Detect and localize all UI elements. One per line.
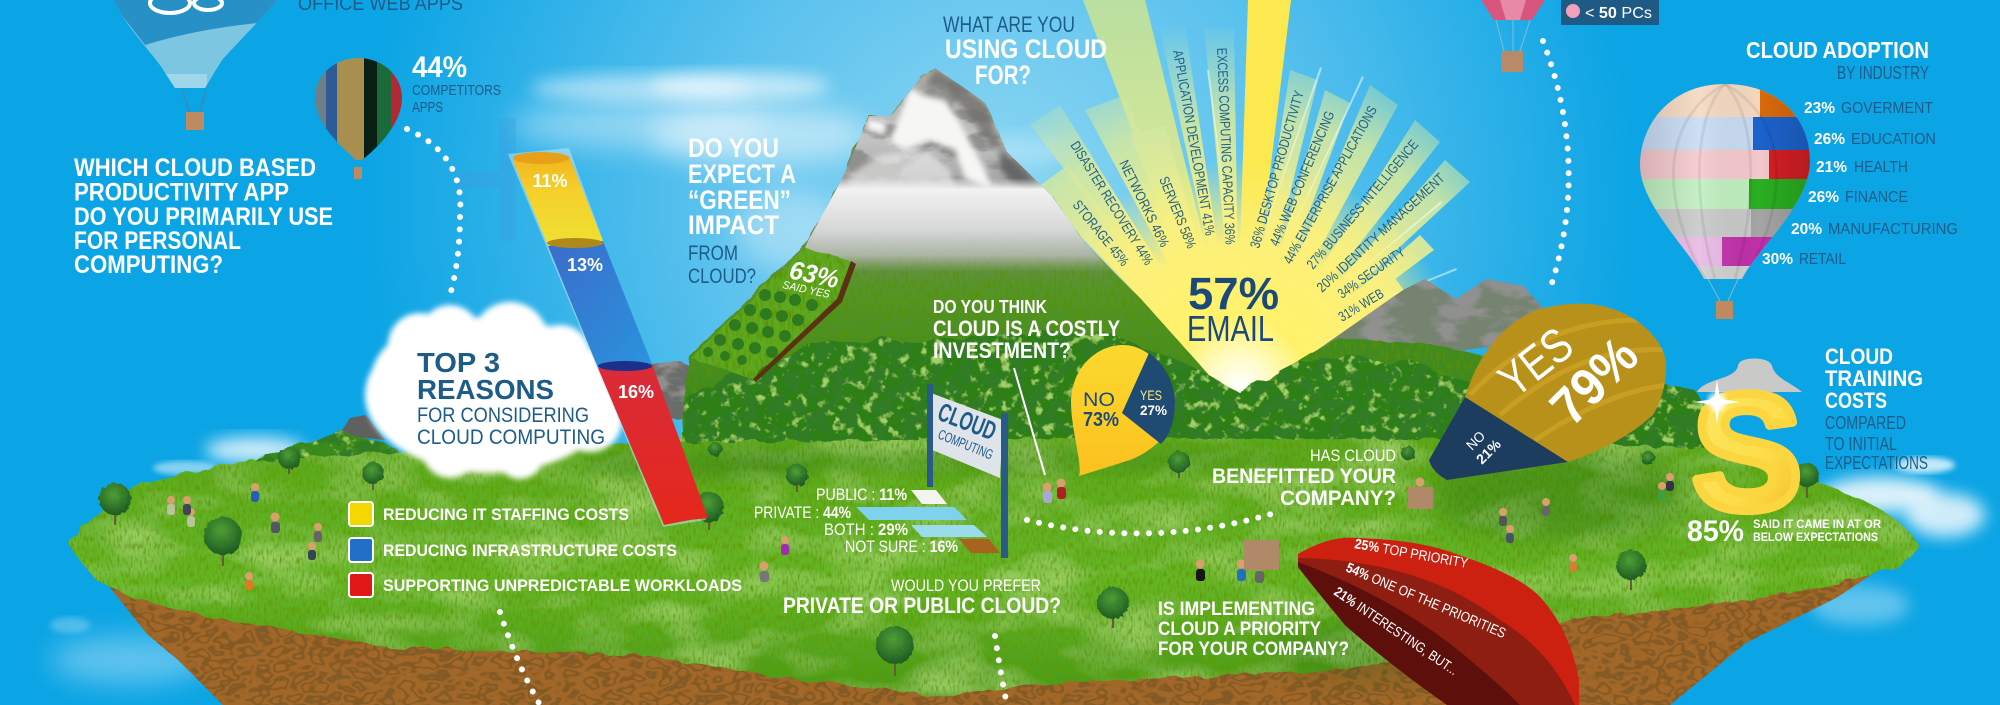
industry labels xyxy=(1762,100,1958,268)
red balloon: priority chart xyxy=(1298,538,1579,705)
yellow segment xyxy=(513,156,603,246)
heading: costly investment: INVESTMENT? xyxy=(933,338,1071,363)
top-left balloon xyxy=(114,0,277,130)
44% competitors apps: COMPETITORS xyxy=(412,82,501,99)
heading: private or public: WOULD YOU PREFER xyxy=(891,576,1041,595)
gold balloon labels: 79% xyxy=(1539,326,1650,436)
pie labels: NO xyxy=(1083,390,1115,411)
heading: priority: IS IMPLEMENTING xyxy=(1158,599,1315,620)
heading: what are you using cloud for xyxy=(943,12,1107,90)
dark peak and ridges xyxy=(925,69,1003,150)
heading: private or public xyxy=(783,576,1061,618)
pie labels xyxy=(1083,387,1168,431)
public row: PUBLIC : 11% xyxy=(816,485,907,504)
industry labels: FINANCE xyxy=(1845,189,1908,206)
heading: green impact: EXPECT A xyxy=(688,159,796,189)
training cost text: CLOUD xyxy=(1825,344,1893,369)
heading: cloud adoption: CLOUD ADOPTION xyxy=(1746,37,1929,63)
legend: infrastructure xyxy=(349,538,677,562)
44% competitors apps: 44% xyxy=(412,51,467,84)
ray labels: 31% WEB xyxy=(1335,285,1386,325)
grass shadows xyxy=(580,448,1690,680)
mountain body xyxy=(679,69,1230,450)
trees xyxy=(99,442,1819,676)
85% stat: BELOW EXPECTATIONS xyxy=(1753,530,1878,544)
cloud text: CLOUD COMPUTING xyxy=(417,426,605,449)
glass outline xyxy=(508,148,706,527)
heading: benefitted your company: COMPANY? xyxy=(1280,487,1396,510)
ray labels: SERVERS 58% xyxy=(1156,174,1200,250)
heading: priority: FOR YOUR COMPANY? xyxy=(1158,639,1349,660)
basket xyxy=(354,167,362,179)
ray labels xyxy=(1067,47,1448,325)
dotted connectors xyxy=(407,41,1569,705)
legend: infrastructure: REDUCING INFRASTRUCTURE COSTS xyxy=(383,541,677,560)
legend: staffing xyxy=(349,502,629,526)
cloud text: FOR CONSIDERING xyxy=(417,404,589,427)
private row xyxy=(754,503,967,522)
cardboard boxes xyxy=(1244,487,1433,570)
dollar balloon icon: S xyxy=(1692,360,1802,544)
private row: PRIVATE : 44% xyxy=(754,503,851,522)
heading: green impact: CLOUD? xyxy=(688,265,756,288)
industry labels: EDUCATION xyxy=(1851,131,1936,148)
cloud text: TOP 3 xyxy=(417,347,500,378)
industry labels: MANUFACTURING xyxy=(1828,221,1958,238)
basket xyxy=(186,112,204,130)
85% stat xyxy=(1687,515,1881,548)
both row xyxy=(824,520,987,539)
pie labels: YES xyxy=(1140,387,1162,403)
forest band xyxy=(679,332,1710,460)
ray labels: DISASTER RECOVERY 44% xyxy=(1067,138,1157,268)
reasons legend xyxy=(349,502,742,597)
ray labels: 27% BUSINESS INTELLIGENCE xyxy=(1303,137,1421,272)
priority labels: 21% INTERESTING, BUT... xyxy=(1331,583,1461,678)
gold balloon: yes 79% xyxy=(1425,300,1675,485)
heading: green impact: FROM xyxy=(688,242,738,265)
heading: what are you using cloud for: FOR? xyxy=(975,60,1031,90)
85% stat: 85% xyxy=(1687,515,1744,548)
industry labels: RETAIL xyxy=(1799,251,1846,268)
competitors balloon xyxy=(315,58,402,179)
ray labels: STORAGE 45% xyxy=(1070,197,1132,269)
heading: what are you using cloud for: WHAT ARE YOU xyxy=(943,12,1075,37)
heading: costly investment xyxy=(933,297,1120,363)
snow xyxy=(845,88,992,192)
industry labels: GOVERMENT xyxy=(1841,100,1933,117)
industry labels: 30% xyxy=(1762,251,1793,268)
heading: private or public: PRIVATE OR PUBLIC CLOUD? xyxy=(783,593,1061,618)
heading: green impact: DO YOU xyxy=(688,133,779,163)
industry labels: 26% xyxy=(1808,189,1839,206)
gold balloon labels xyxy=(1463,318,1650,467)
tube labels: 16% xyxy=(618,382,654,402)
basket xyxy=(1716,301,1733,319)
ray labels: 20% IDENTITY MANAGEMENT xyxy=(1313,169,1448,295)
heading: benefitted your company xyxy=(1212,446,1396,510)
terrace text: 63% xyxy=(787,255,842,294)
ray labels: 44% ENTERPRISE APPLICATIONS xyxy=(1280,103,1380,266)
priority labels xyxy=(1331,535,1508,678)
sign text: CLOUD xyxy=(934,397,1001,446)
heading: productivity app question: PRODUCTIVITY APP xyxy=(74,178,289,206)
legend: workloads xyxy=(349,573,742,597)
rock and snow xyxy=(805,69,1110,271)
people xyxy=(167,473,1674,590)
industry labels: 21% xyxy=(1816,159,1847,176)
heading: benefitted your company: BENEFITTED YOUR xyxy=(1212,465,1396,488)
sign text xyxy=(934,397,1001,463)
44% competitors apps xyxy=(412,51,501,116)
island grass xyxy=(70,438,1918,696)
training cost text xyxy=(1825,344,1928,473)
industry labels: 20% xyxy=(1791,221,1822,238)
blue segment xyxy=(548,241,652,368)
gold balloon labels: YES xyxy=(1489,318,1583,408)
ropes xyxy=(182,90,206,112)
heading: productivity app question: COMPUTING? xyxy=(74,251,223,279)
main mountain xyxy=(679,60,1230,450)
heading: productivity app question: WHICH CLOUD BASED xyxy=(74,154,316,182)
terrace text: SAID YES xyxy=(781,279,831,301)
gold balloon labels: 21% xyxy=(1473,436,1504,467)
industry labels: HEALTH xyxy=(1854,159,1908,176)
training cost text: TRAINING xyxy=(1825,366,1923,391)
85% stat: SAID IT CAME IN AT OR xyxy=(1753,517,1881,531)
basket xyxy=(1501,51,1523,72)
gold balloon labels: NO xyxy=(1463,428,1488,453)
44% competitors apps: APPS xyxy=(412,99,443,116)
training cost text: COMPARED xyxy=(1825,413,1906,433)
57% email: 57% xyxy=(1188,268,1279,319)
ray labels: NETWORKS 46% xyxy=(1116,157,1173,249)
heading: priority xyxy=(1158,599,1349,660)
industry labels: 23% xyxy=(1804,100,1835,117)
tube labels xyxy=(532,171,654,402)
size legend chip xyxy=(1561,0,1659,25)
cloud text xyxy=(417,347,605,449)
heading: benefitted your company: HAS CLOUD xyxy=(1310,446,1396,465)
ray labels: EXCESS COMPUTING CAPACITY 36% xyxy=(1214,47,1239,245)
cloud text: REASONS xyxy=(417,374,554,405)
57% email: EMAIL xyxy=(1187,308,1274,349)
heading: green impact: “GREEN” xyxy=(688,185,791,215)
priority labels: 25% TOP PRIORITY xyxy=(1353,535,1470,571)
island soil xyxy=(96,520,1894,705)
sun glow xyxy=(1015,160,1465,610)
cloud computing sign xyxy=(927,384,1008,558)
cloud: top 3 reasons xyxy=(365,302,622,479)
pointer line xyxy=(1014,368,1045,475)
heading: costly investment: DO YOU THINK xyxy=(933,297,1047,317)
heading: green impact xyxy=(688,133,796,288)
training cost text: COSTS xyxy=(1825,388,1887,413)
size legend chip: < 50 PCs xyxy=(1585,5,1652,22)
not sure row: NOT SURE : 16% xyxy=(845,537,958,556)
left small rocks xyxy=(339,361,706,440)
legend: workloads: SUPPORTING UNPREDICTABLE WORKLOADS xyxy=(383,576,742,595)
heading: green impact: IMPACT xyxy=(688,210,779,240)
industry balloon chart xyxy=(1640,84,1810,319)
red segment xyxy=(598,364,708,525)
training cost text: EXPECTATIONS xyxy=(1825,453,1928,473)
heading: productivity app question: FOR PERSONAL xyxy=(74,227,241,255)
left bushes xyxy=(237,432,410,470)
heading: productivity app question xyxy=(74,154,333,279)
tube labels: 13% xyxy=(567,255,603,275)
training cost text: TO INITIAL xyxy=(1825,434,1897,454)
sparkle xyxy=(1694,380,1740,424)
ray labels: 34% SECURITY xyxy=(1335,243,1408,301)
heading: what are you using cloud for: USING CLOUD xyxy=(945,34,1107,64)
ray labels: APPLICATION DEVELOPMENT 41% xyxy=(1170,49,1218,237)
balloon logo xyxy=(150,0,222,13)
heading: productivity app question: DO YOU PRIMARILY USE xyxy=(74,203,333,231)
stacked tube chart xyxy=(508,148,708,527)
faint cross shape in sky xyxy=(455,118,516,241)
sign text: COMPUTING xyxy=(936,426,996,463)
tube labels: 11% xyxy=(532,171,568,191)
pie labels: 73% xyxy=(1083,409,1119,431)
cloud belt xyxy=(805,178,1110,271)
heading: cloud adoption: BY INDUSTRY xyxy=(1837,63,1929,83)
ray labels: 44% WEB CONFERENCING xyxy=(1266,108,1337,248)
right small mountain xyxy=(1250,279,1543,460)
priority labels: 54% ONE OF THE PRIORITIES xyxy=(1344,559,1508,641)
private vs public chart xyxy=(754,485,1000,556)
heading: costly investment: CLOUD IS A COSTLY xyxy=(933,316,1120,341)
pink balloon xyxy=(1481,0,1545,72)
heading: cloud adoption xyxy=(1746,37,1929,83)
legend: staffing: REDUCING IT STAFFING COSTS xyxy=(383,505,629,524)
terrace bushes xyxy=(703,289,818,365)
57% email xyxy=(1187,268,1279,349)
pie chart: costly investment xyxy=(1071,345,1175,476)
pie labels: 27% xyxy=(1140,402,1168,418)
both row: BOTH : 29% xyxy=(824,520,908,539)
sun rays xyxy=(1030,0,1470,395)
industry labels: 26% xyxy=(1814,131,1845,148)
grass terrace: 63% said yes xyxy=(692,248,856,382)
heading: priority: CLOUD A PRIORITY xyxy=(1158,619,1321,640)
ray labels: 36% DESKTOP PRODUCTIVITY xyxy=(1247,88,1307,250)
